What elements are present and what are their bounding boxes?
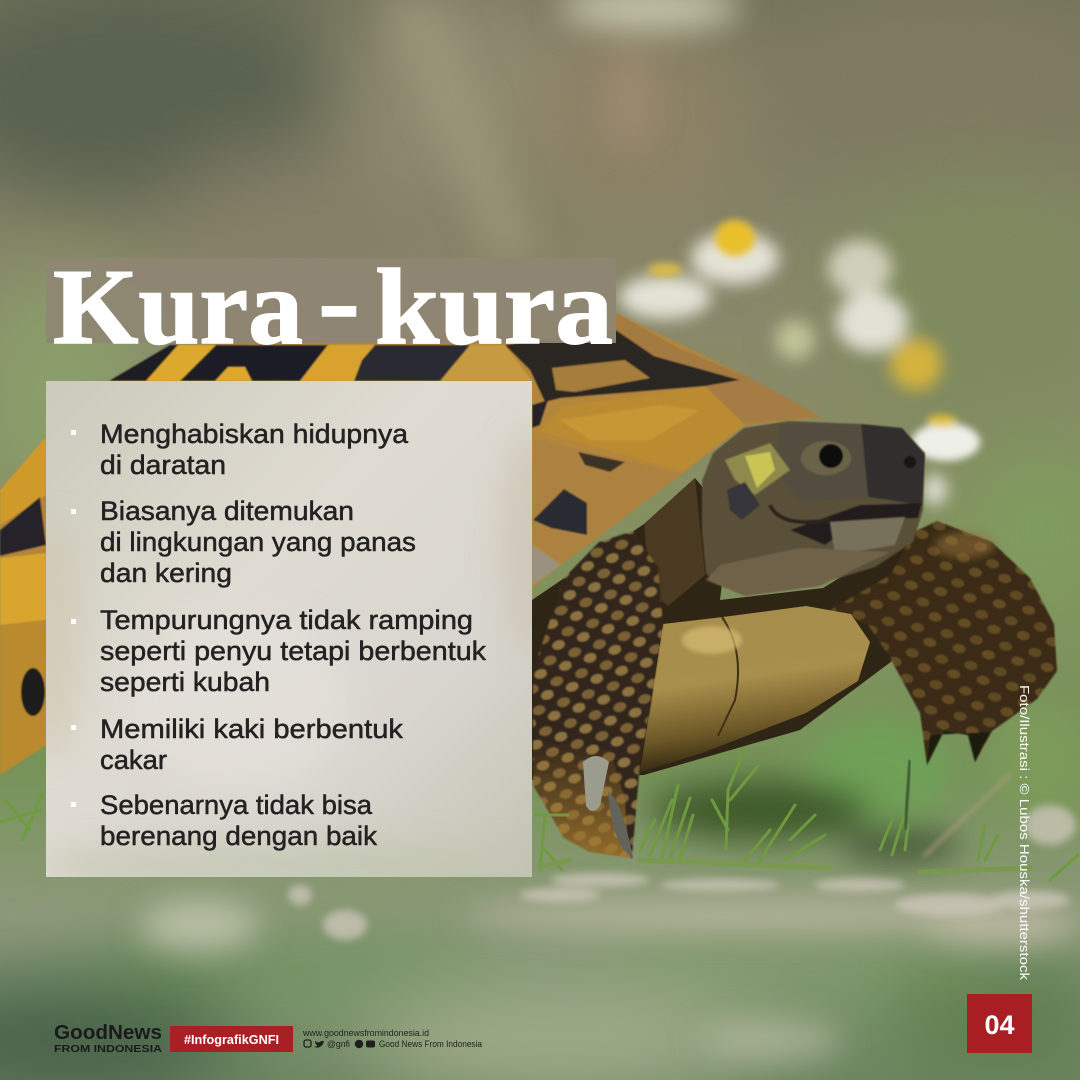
item 1: Menghabiskan hidupnya: [100, 419, 409, 449]
title: -: [318, 242, 360, 361]
item 2: [71, 496, 416, 588]
icon: facebook: [355, 1040, 363, 1048]
title band: [46, 258, 616, 343]
item 2: dan kering: [100, 558, 232, 588]
item 5: [71, 790, 378, 851]
page number: [967, 994, 1032, 1053]
icon: instagram: [304, 1040, 311, 1047]
bullet list: [71, 419, 487, 851]
lower scute: [532, 438, 682, 565]
plastron: [640, 606, 870, 772]
item 3: seperti penyu tetapi berbentuk: [100, 636, 487, 666]
item 1: [71, 419, 409, 480]
footer logo: FROM INDONESIA: [54, 1043, 162, 1055]
hashtag badge: #InfografikGNFI: [184, 1032, 279, 1047]
head: [702, 421, 925, 596]
item 4: cakar: [100, 745, 167, 775]
item 3: Tempurungnya tidak ramping: [100, 605, 473, 635]
footer links: @gnfi: [327, 1039, 350, 1049]
photo credit: Foto/Ilustrasi : © Lubos Houska/shutterstock: [1017, 685, 1032, 981]
footer links: [302, 1028, 482, 1049]
title: [46, 242, 616, 367]
front leg: [533, 531, 663, 858]
footer logo: GoodNews: [54, 1022, 162, 1044]
title: kura: [375, 248, 613, 367]
title: Kura: [53, 248, 303, 367]
plastron seam: [718, 617, 738, 736]
item 5: Sebenarnya tidak bisa: [100, 790, 373, 820]
ground gravel and grass: [0, 748, 1078, 940]
panel background: [31, 381, 560, 887]
eye: [801, 441, 851, 475]
green meadow behind legs: [650, 700, 1080, 861]
neck and body shadow: [532, 478, 920, 780]
claws: [583, 756, 633, 858]
item 3: [71, 605, 487, 697]
panel: facts: [31, 381, 560, 887]
icon: youtube: [366, 1040, 375, 1048]
item 5: berenang dengan baik: [100, 821, 378, 851]
hashtag badge: [170, 1026, 293, 1052]
item 3: seperti kubah: [100, 667, 270, 697]
far leg: [830, 521, 1057, 765]
large scute: [540, 387, 744, 471]
page number: 04: [984, 1010, 1015, 1040]
rear upper scutes: [505, 330, 740, 402]
footer links: www.goodnewsfromindonesia.id: [302, 1028, 429, 1038]
blurred flowers: [619, 232, 946, 505]
top band stripes: [109, 345, 180, 381]
item 4: Memiliki kaki berbentuk: [100, 714, 404, 744]
turtle: [0, 313, 1057, 858]
footer logo: [54, 1022, 162, 1055]
item 4: [71, 714, 404, 775]
left shell: [0, 437, 46, 525]
shell: [0, 313, 822, 775]
footer links: Good News From Indonesia: [379, 1039, 482, 1049]
item 1: di daratan: [100, 450, 226, 480]
icon: twitter: [314, 1041, 324, 1048]
item 2: di lingkungan yang panas: [100, 527, 416, 557]
item 2: Biasanya ditemukan: [100, 496, 354, 526]
